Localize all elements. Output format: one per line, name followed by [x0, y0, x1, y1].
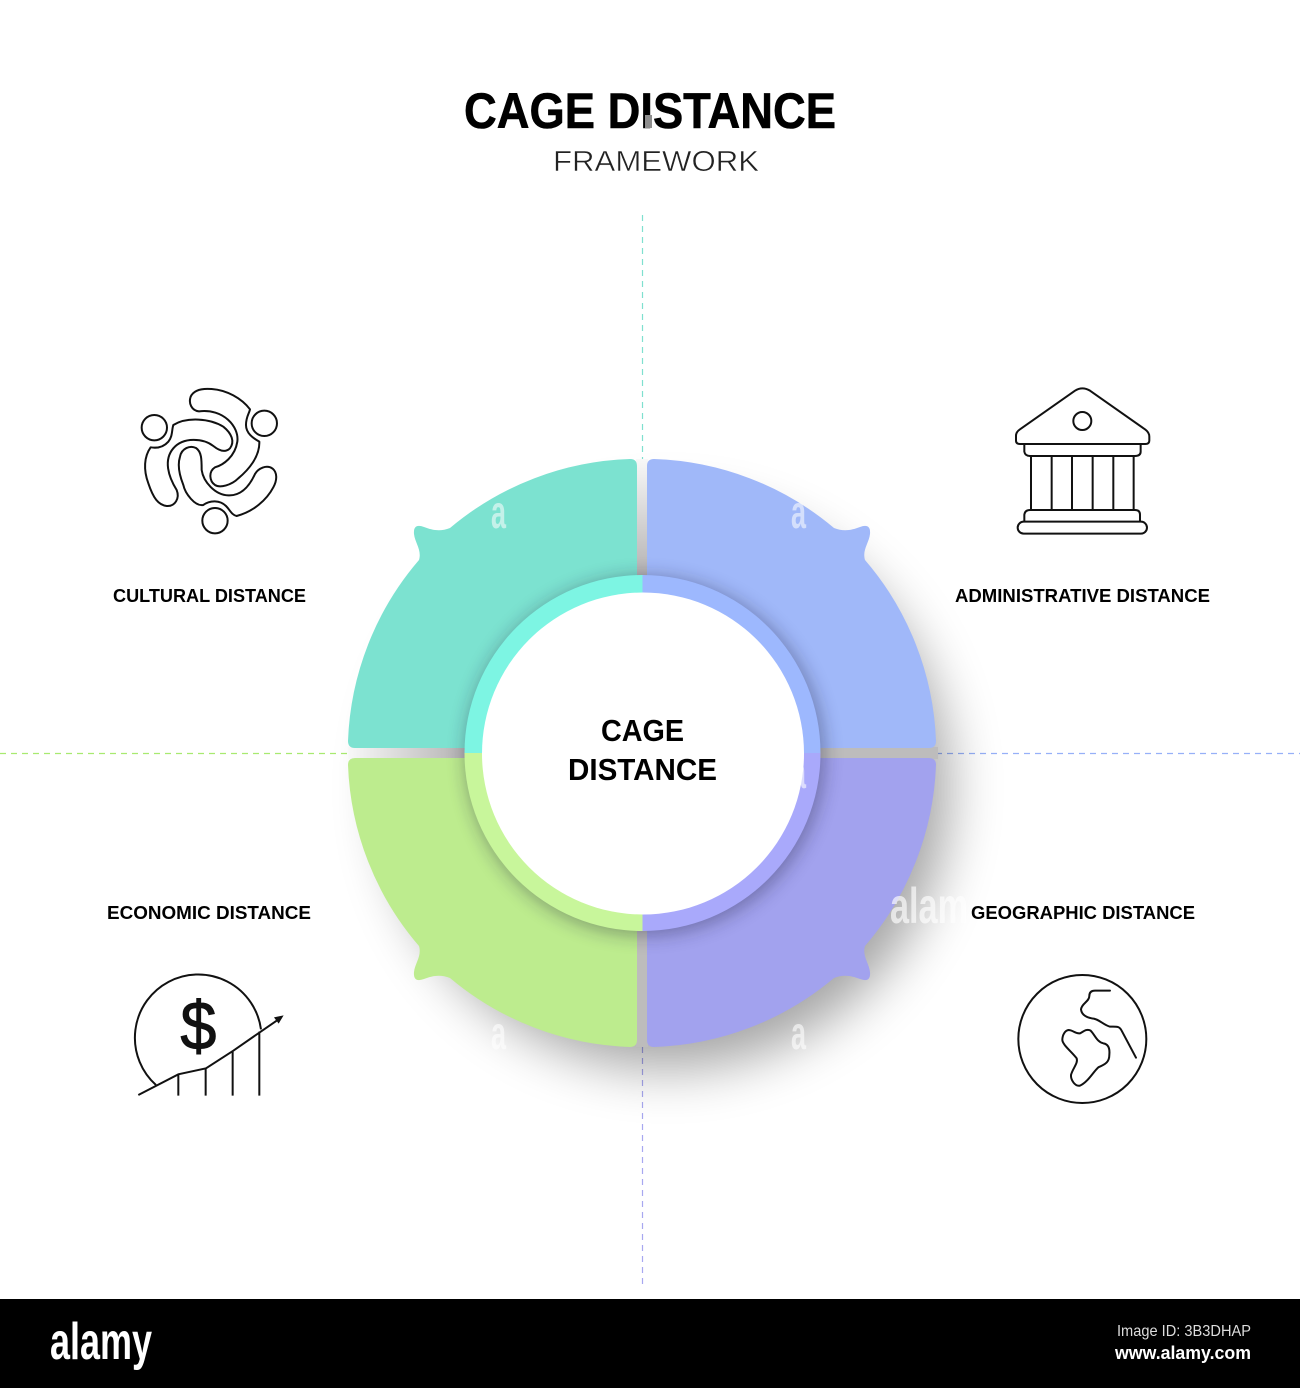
inner ring: [464, 575, 820, 931]
footer bar: [0, 1299, 1300, 1388]
watermark glyphs: a: [491, 1007, 506, 1059]
label: economic distance: ECONOMIC DISTANCE: [107, 903, 311, 923]
watermark glyphs: a: [791, 746, 806, 798]
subtitle: FRAMEWORK: [553, 146, 760, 178]
segment: cultural: [348, 459, 637, 748]
gaps between segments: [348, 459, 938, 1047]
icon: dollar with growth chart: [135, 974, 284, 1096]
footer logo: alamy: [50, 1313, 152, 1371]
icon: people circle: [142, 389, 277, 533]
ring shadow: [465, 576, 825, 936]
drop shadow of wheel: [388, 508, 948, 1068]
centre label: CAGE: [601, 713, 684, 748]
watermark glyphs: alam: [890, 878, 968, 934]
segment: geographic: [647, 758, 936, 1047]
central diagram: [348, 459, 948, 1068]
watermark glyphs: [491, 486, 968, 1059]
site url: www.alamy.com: [1114, 1343, 1251, 1363]
icon: globe: [1018, 975, 1146, 1103]
label: geographic distance: GEOGRAPHIC DISTANCE: [971, 903, 1195, 923]
segment: economic: [348, 758, 637, 1047]
title: CAGE DISTANCE: [464, 83, 836, 139]
centre label: [568, 713, 717, 787]
icon: government building: [1016, 388, 1149, 534]
title: [464, 83, 836, 178]
watermark glyphs: a: [791, 486, 806, 538]
watermark glyphs: a: [791, 1007, 806, 1059]
watermark glyphs: a: [491, 486, 506, 538]
image id: Image ID: 3B3DHAP: [1117, 1323, 1251, 1340]
centre disc: [482, 592, 804, 914]
icon: dollar with growth chart: $: [180, 989, 216, 1065]
label: administrative distance: ADMINISTRATIVE DISTANCE: [955, 586, 1210, 606]
segment: administrative: [647, 459, 936, 748]
label: cultural distance: CULTURAL DISTANCE: [113, 586, 306, 606]
dashed axis lines: [0, 215, 1300, 1286]
centre label: DISTANCE: [568, 752, 717, 787]
